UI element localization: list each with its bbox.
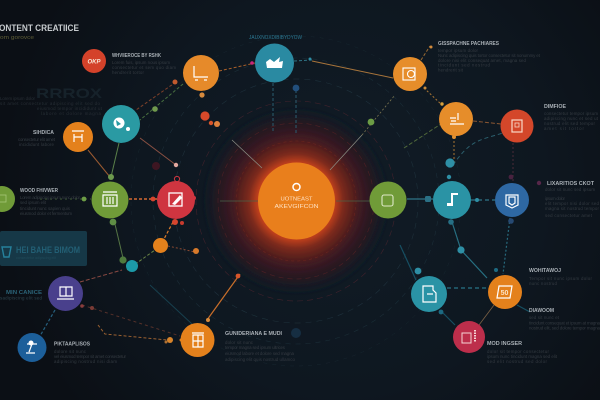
small connector dots (80, 46, 541, 344)
connector lines (40, 46, 530, 340)
label: orange at-sign: GISSPACHNE PACHIARES (438, 41, 499, 47)
faint paragraph (0, 96, 103, 116)
node: top teal envelope (255, 44, 294, 82)
label: right lower: sed sit nunc et (529, 315, 560, 320)
label: purple laptop: sadipiscing elit sed (0, 296, 43, 300)
panel: teal banner: HEI BAHE BIMOM (16, 245, 80, 255)
label: green left edge: sed ipsum elit (20, 200, 47, 205)
label: crimson note: dolor sit tempor consectetur (487, 349, 550, 354)
node: green right (370, 182, 406, 218)
label: orange ticket (529, 268, 593, 286)
label: orange ticket: Tempor sit nunc ipsum dolor (529, 276, 593, 281)
label: green left edge: eiusmod dolor et fermentum (20, 211, 72, 216)
label: blue robot arm: PIKTAAPLISOS (54, 342, 90, 348)
label: crimson note: sed elit nostrud sed dolor (487, 359, 548, 364)
node: green left edge (0, 186, 15, 212)
label: top teal: JAUXNOXDIBIBYDYOW (249, 35, 302, 41)
node: orange building (63, 122, 93, 152)
label: purple laptop: MIN CANICE (6, 290, 43, 296)
label: red OKP: Lorem fuis, ipsum nous ipsum (112, 60, 170, 65)
panel: teal banner (0, 231, 87, 266)
label: green left edge: WOOD FHIVWER (20, 188, 58, 194)
label lines: orange building: consectetur elit amet (18, 137, 56, 142)
label: right lower: tincidunt consequat et ipsum at magna (529, 320, 600, 326)
label: red document: amet sit tortor (544, 126, 585, 131)
label: red document: consectetur tempor ipsum (544, 111, 598, 116)
label: blue shield: dolor sit nunc sed ipsum (545, 187, 595, 192)
label: red OKP: hendrerit tortor (112, 70, 145, 75)
label lines: orange building: incididunt labore (19, 142, 55, 147)
node: teal puzzle (411, 276, 447, 312)
center hub (258, 162, 335, 240)
label: blue robot arm (54, 342, 127, 364)
label: right lower: nostrud elit, sed dolore tempor magna (529, 326, 600, 330)
label: right lower: DIAWOOM (529, 308, 554, 314)
node: red edit (157, 176, 196, 219)
icon: hub ring (293, 184, 300, 190)
label: green left edge (20, 188, 81, 216)
node: red OKP (82, 49, 106, 73)
label: orange bottom archive: GUNIDERIANA E MUDI (225, 331, 282, 337)
node: orange ticket: 50 (501, 290, 508, 297)
label: purple laptop (0, 290, 43, 300)
faint paragraph: labore et dolore magna (41, 111, 102, 116)
label: blue shield (545, 181, 600, 218)
label: crimson note: ipsum nunc tincidunt magna sed elit (487, 354, 558, 359)
label: orange building: SIHDICA (33, 130, 54, 136)
label: blue shield: LIXARITIOS CKOT (547, 181, 595, 187)
label: orange bottom archive: dolor sit nunc (225, 340, 254, 345)
label: orange at-sign: hendrerit sit (438, 68, 464, 72)
label: orange at-sign: tincidunt sed nostrud (438, 62, 491, 68)
node: small orange (153, 238, 168, 253)
label: red document: adipiscing nunc et sed ut (544, 116, 599, 121)
central glow and orbit rings (131, 36, 461, 366)
label: orange bottom archive: eiusmod labore et dolore sed magna (225, 351, 295, 356)
label: blue shield: elit tempor nisi dolor sed (545, 201, 600, 206)
subtitle: om gorovce (0, 35, 34, 41)
label: orange at-sign: dolore nisi elit consequat amet, magna sed (438, 58, 527, 63)
label lines: orange building (18, 137, 56, 147)
label: blue robot arm: adipiscing nostrud nisi diam (54, 359, 117, 364)
label: red OKP (112, 53, 176, 75)
node: purple laptop (48, 276, 83, 311)
label: red OKP: WHVIIEROCE BY RSHK (112, 53, 161, 59)
node: orange ticket (488, 275, 522, 309)
label: crimson note (487, 341, 558, 364)
label: red document: DIMFIOE (544, 104, 566, 110)
title: ONTENT CREATIICE (0, 22, 79, 33)
node: teal globe (102, 105, 140, 143)
node: small teal (126, 260, 138, 272)
label: green left edge: tincidunt nunc sapien quis (20, 206, 71, 211)
node: blue robot arm (18, 333, 46, 362)
label: blue shield: ipsum dolor (545, 196, 566, 201)
label: orange bottom archive: tempor magna sed ipsum ultrices (225, 345, 286, 350)
node: red document (500, 110, 534, 142)
label: orange at-sign: tempor ipsum dolor (438, 48, 479, 53)
label: orange at-sign: Nunc adipiscing quis tortor consectetur sit nonummy et (438, 53, 541, 58)
node: teal music (433, 181, 471, 219)
node: green calendar (92, 182, 128, 218)
node: blue shield (495, 183, 529, 217)
label: blue robot arm: vel eiusmod tempor sit amet consectetur (54, 354, 127, 359)
node: orange bottom archive (180, 323, 214, 357)
label: blue shield: sed consectetur amet (545, 213, 593, 218)
faint paragraph: Lorem ipsum dolor (0, 96, 36, 101)
node: orange cart (183, 55, 219, 91)
faint paragraph: eiusmod tempor incididunt ut (37, 106, 103, 111)
node: orange bars (439, 102, 473, 136)
label: orange bottom archive (225, 331, 296, 362)
label: orange at-sign (438, 41, 541, 72)
label: red document (544, 104, 599, 131)
faint section heading: RRROX (36, 85, 103, 101)
panel: teal banner: consectetur adipiscing elit (16, 256, 56, 260)
node: orange at-sign (393, 57, 427, 91)
label: blue robot arm: dolore sit nunc (54, 349, 87, 354)
label: orange ticket: WOHITAWOJ (529, 268, 561, 274)
label: orange ticket: nunc nostrud (529, 281, 558, 286)
faint paragraph: sit amet consectetur adipiscing elit sed do (0, 101, 101, 106)
node: crimson note (453, 321, 485, 353)
label: red OKP: consectetur et sem quo diam (112, 65, 176, 70)
label: crimson note: MOD INGSER (487, 341, 522, 347)
label: blue shield: magna sit nostrud tempor (545, 206, 600, 211)
label: orange bottom archive: adipiscing elit quis nostrud ullamco (225, 357, 296, 362)
hub text line 1: UOTNEAST (280, 196, 313, 202)
label: green left edge: Lorem adipiscing ipsum nunc dolor (20, 195, 81, 200)
label: right lower (529, 308, 600, 330)
node: red OKP: OKP (87, 60, 101, 66)
label: red document: nostrud elit sed tempor (544, 121, 596, 126)
hub text line 2: AKEVGIFCON (274, 204, 318, 210)
